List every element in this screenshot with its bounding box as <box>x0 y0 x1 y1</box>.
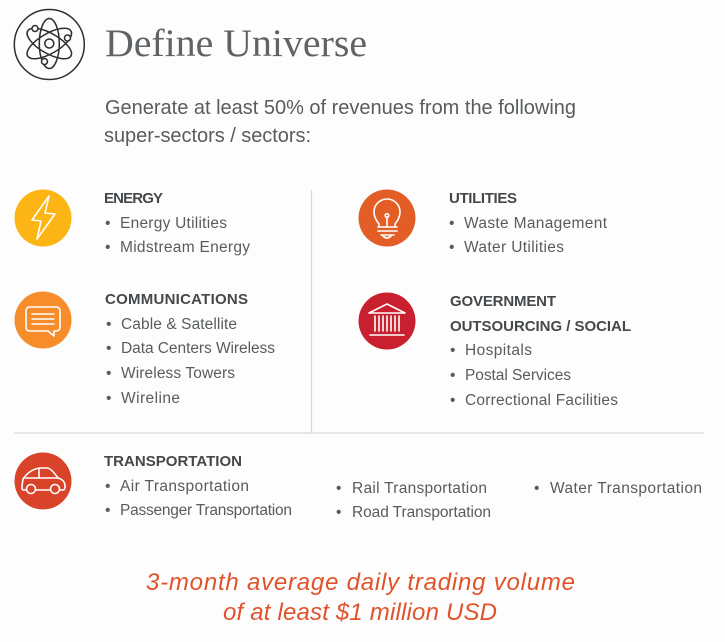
intro text: Generate at least 50% of revenues from the following <box>105 97 576 119</box>
vertical divider <box>310 190 312 433</box>
panel: government outsourcing / social: • <box>450 367 455 384</box>
horizontal divider <box>14 432 704 434</box>
panel: government outsourcing / social: • <box>450 392 455 409</box>
panel: energy: • <box>105 239 110 256</box>
callout: trading volume <box>146 569 575 626</box>
title: Define Universe <box>105 22 367 65</box>
panel: communications: • <box>106 340 111 357</box>
panel: transportation: • <box>336 504 341 521</box>
panel: energy: • <box>105 215 110 232</box>
panel: government outsourcing / social <box>450 293 631 409</box>
panel: energy: Midstream Energy <box>120 239 250 256</box>
icon: transportation car <box>14 452 72 510</box>
panel: transportation: TRANSPORTATION <box>104 453 242 470</box>
icon: communications speech bubble <box>14 292 72 348</box>
panel: transportation: • <box>105 478 110 495</box>
panel: transportation: • <box>105 502 110 519</box>
panel: communications: Wireless Towers <box>121 365 235 382</box>
panel: utilities: • <box>449 215 454 232</box>
panel: communications: Wireline <box>121 390 180 407</box>
panel: utilities: • <box>449 239 454 256</box>
panel: communications: • <box>106 365 111 382</box>
panel: communications: Data Centers Wireless <box>121 340 275 357</box>
panel: utilities: Water Utilities <box>464 239 564 256</box>
icon: utilities light bulb <box>358 190 416 246</box>
callout: trading volume: of at least $1 million USD <box>223 599 497 626</box>
panel: communications: • <box>106 390 111 407</box>
panel: transportation: • <box>534 480 539 497</box>
panel: transportation: Road Transportation <box>352 504 491 521</box>
panel: transportation: Air Transportation <box>120 478 249 495</box>
panel: utilities <box>449 190 608 256</box>
panel: government outsourcing / social: Postal Services <box>465 367 571 384</box>
icon: atom <box>14 10 84 80</box>
icon: energy lightning bolt <box>14 190 72 246</box>
panel: transportation: • <box>336 480 341 497</box>
panel: communications: Cable & Satellite <box>121 316 237 333</box>
panel: utilities: UTILITIES <box>449 190 517 207</box>
panel: energy: Energy Utilities <box>120 215 227 232</box>
panel: government outsourcing / social: GOVERNMENT <box>450 293 556 310</box>
panel: transportation: Water Transportation <box>550 480 702 497</box>
intro text: super-sectors / sectors: <box>104 125 311 147</box>
panel: transportation <box>104 453 702 521</box>
panel: communications <box>105 291 275 407</box>
panel: communications: • <box>106 316 111 333</box>
panel: energy <box>104 190 250 256</box>
panel: communications: COMMUNICATIONS <box>105 291 248 308</box>
panel: government outsourcing / social: OUTSOURCING / SOCIAL <box>450 318 631 335</box>
icon: government building <box>358 292 416 350</box>
callout: trading volume: 3-month average daily trading volume <box>146 569 575 596</box>
panel: transportation: Rail Transportation <box>352 480 487 497</box>
panel: energy: ENERGY <box>104 190 163 207</box>
panel: transportation: Passenger Transportation <box>120 502 292 519</box>
panel: utilities: Waste Management <box>464 215 608 232</box>
panel: government outsourcing / social: Hospitals <box>465 342 532 359</box>
panel: government outsourcing / social: Correctional Facilities <box>465 392 618 409</box>
panel: government outsourcing / social: • <box>450 342 455 359</box>
intro text <box>104 97 576 147</box>
